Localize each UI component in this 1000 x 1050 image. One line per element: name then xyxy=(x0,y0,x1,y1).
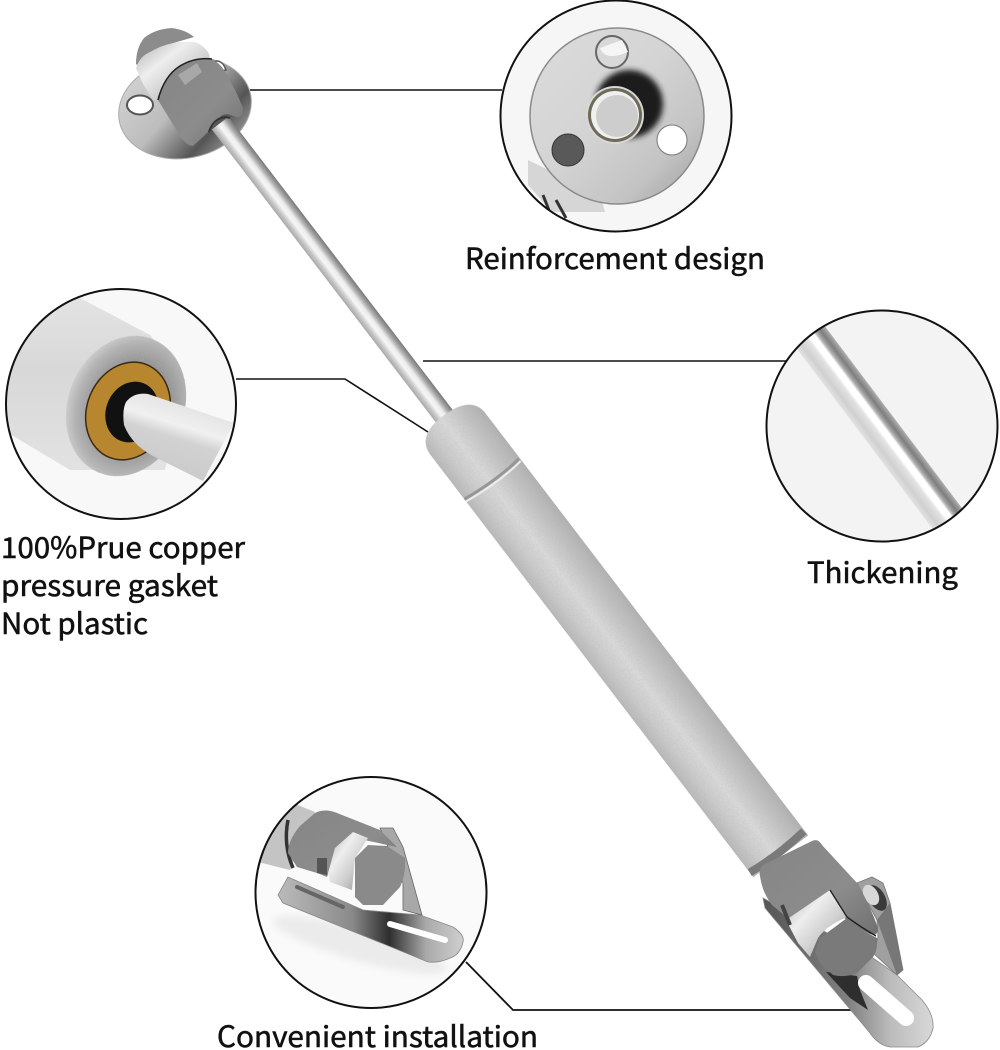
top mounting plate xyxy=(109,45,261,171)
text block: copper gasket: 100%Prue copper xyxy=(1,525,246,567)
gas spring product xyxy=(109,28,933,1047)
detail circle: copper gasket xyxy=(0,268,236,519)
detail circle: reinforcement design xyxy=(500,0,732,232)
piston rod xyxy=(212,117,454,425)
top gray boot and chrome band xyxy=(136,28,243,146)
leader line: thickening xyxy=(423,360,786,362)
detail circle: convenient installation xyxy=(250,777,486,1008)
leader line: convenient installation xyxy=(466,962,863,1010)
leader line: pressure gasket xyxy=(236,379,428,432)
text block: copper gasket xyxy=(1,525,246,643)
gas cylinder body xyxy=(416,394,808,877)
leader line: reinforcement design xyxy=(250,89,502,91)
heading: thickening: Thickening xyxy=(807,550,958,592)
detail circle: thickening xyxy=(766,310,998,542)
heading: reinforcement design: Reinforcement design xyxy=(465,236,765,278)
text block: copper gasket: Not plastic xyxy=(1,601,148,643)
bottom bracket and slotted plate xyxy=(763,877,933,1047)
bottom gray boot and chrome band xyxy=(760,840,878,976)
text block: copper gasket: pressure gasket xyxy=(1,563,218,605)
